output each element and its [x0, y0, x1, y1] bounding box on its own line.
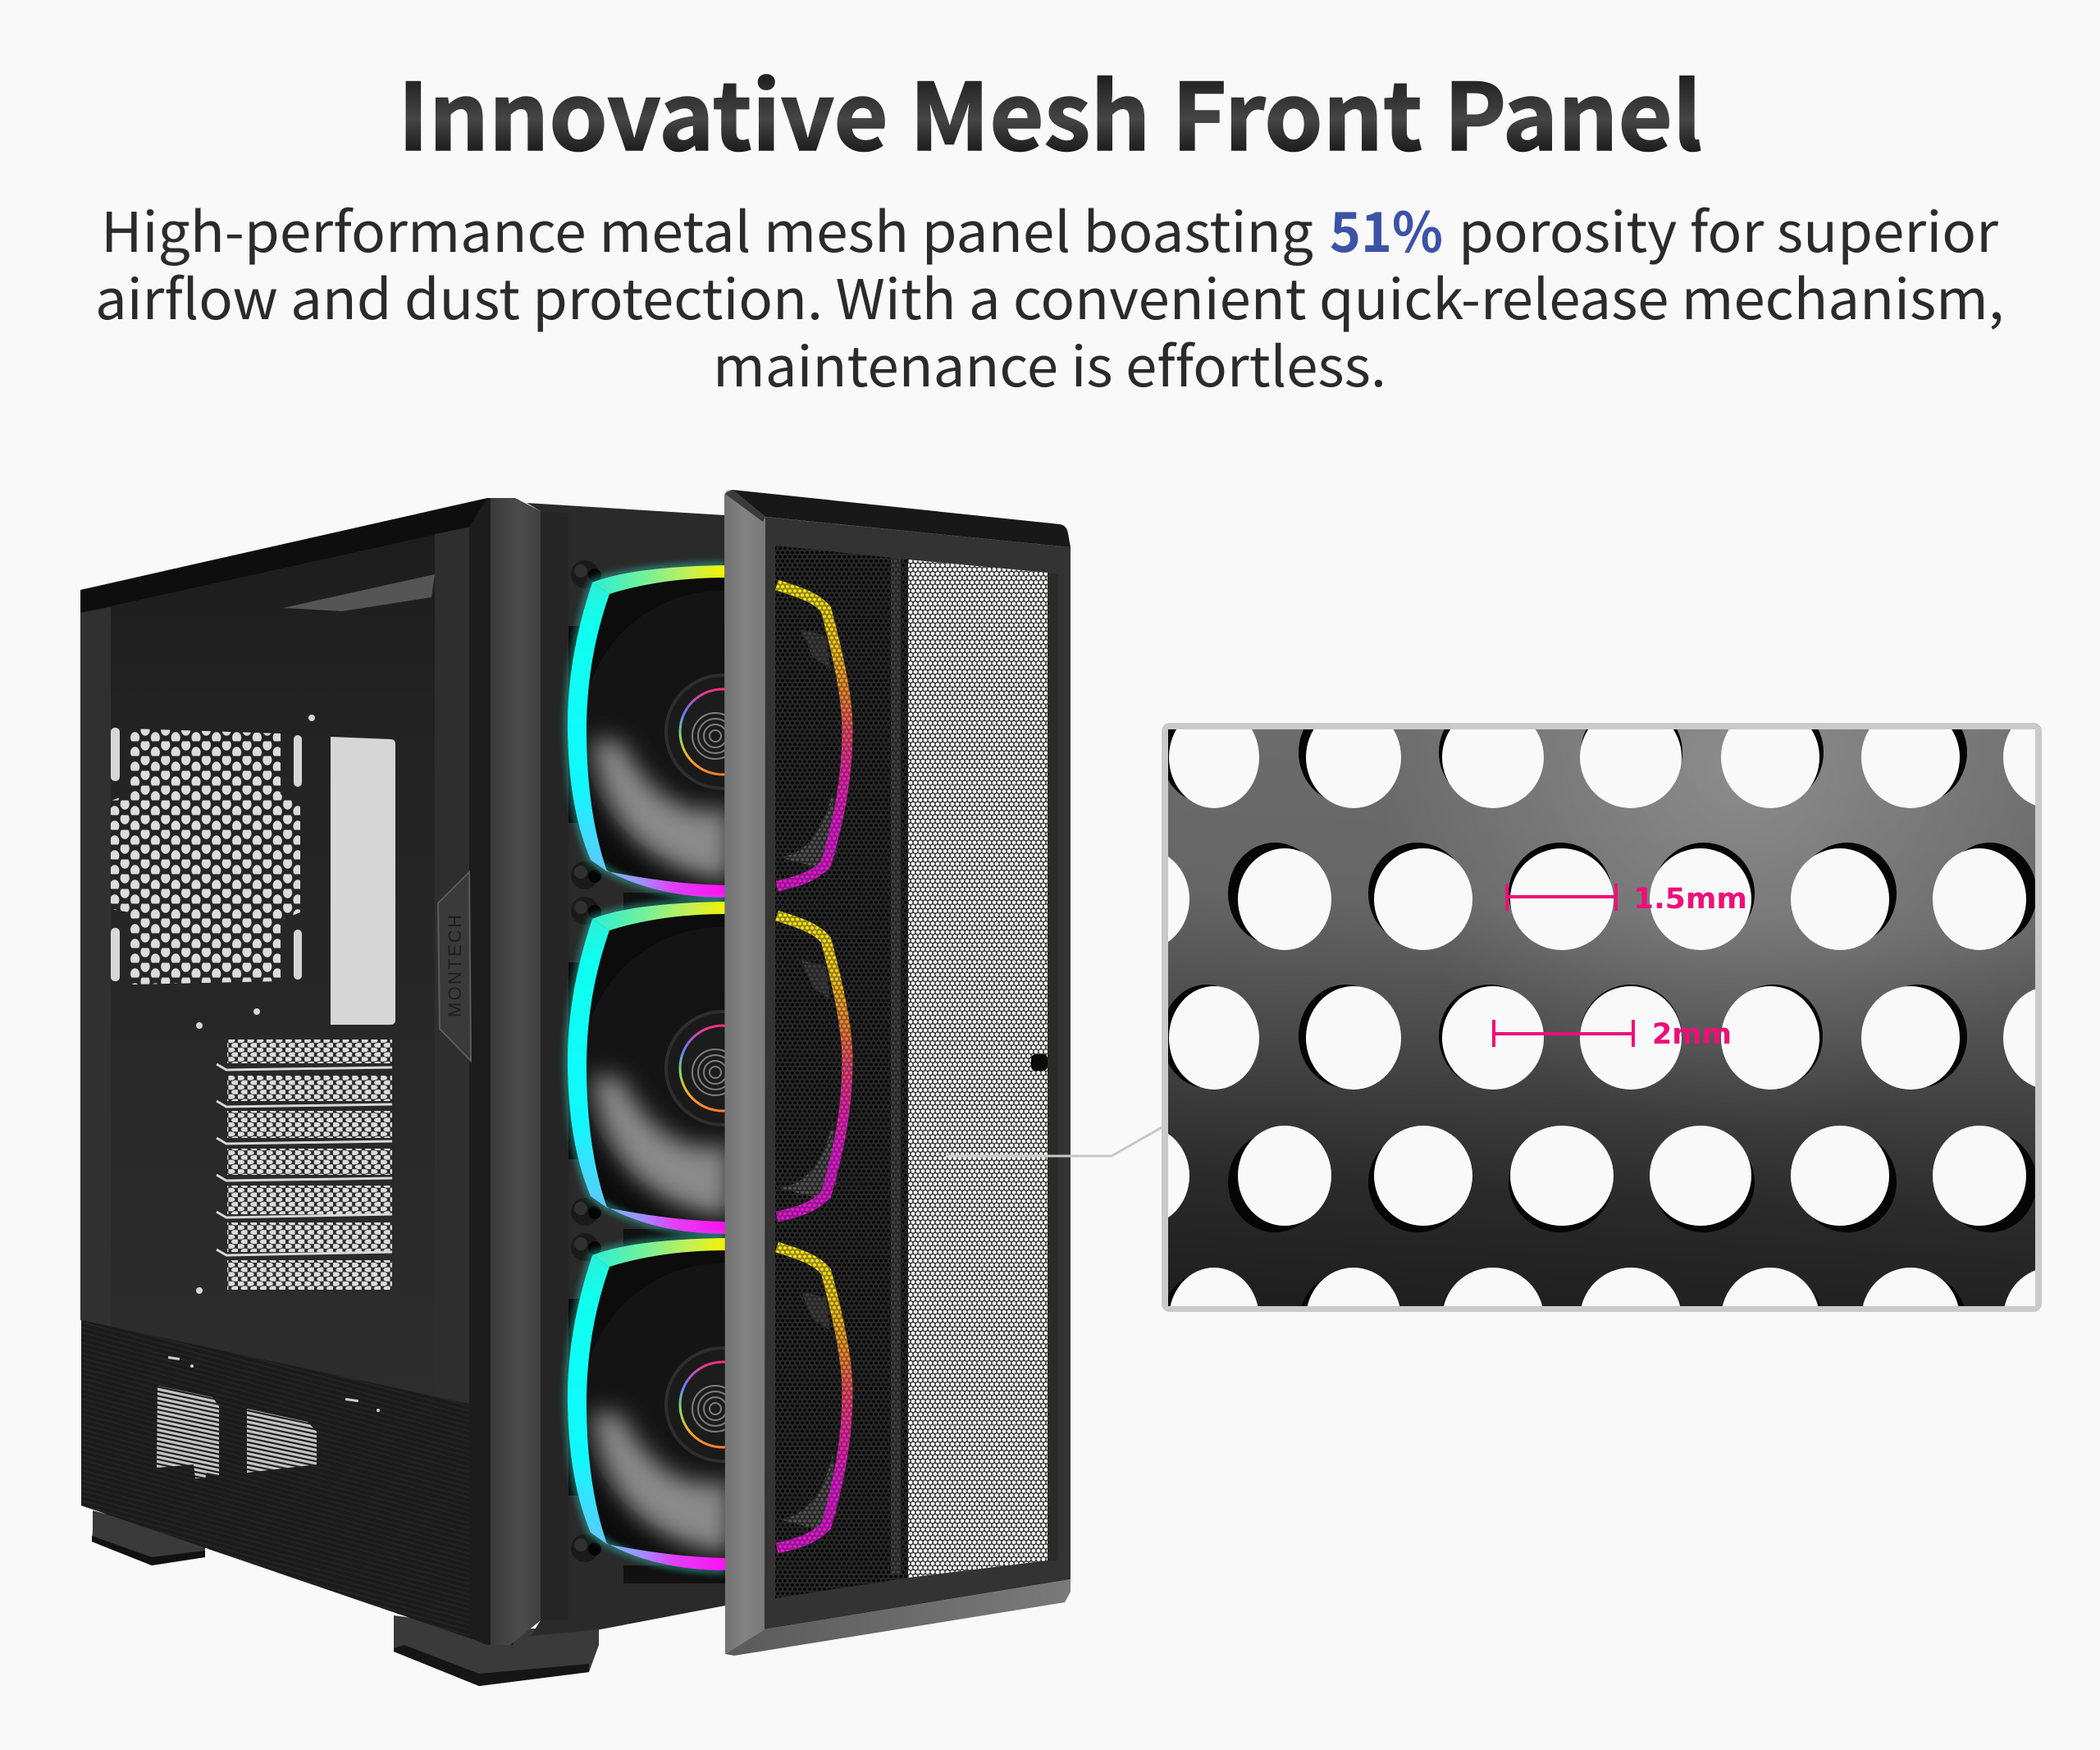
door latch — [1031, 1054, 1048, 1071]
front door panel — [724, 490, 1071, 1656]
title: Innovative Mesh Front Panel — [398, 43, 1702, 177]
magnified mesh callout panel — [1162, 723, 2042, 1312]
description text: 51% — [1330, 189, 1443, 268]
front pillar — [469, 498, 541, 1645]
holes — [1168, 729, 2035, 1306]
hole shadows — [1168, 729, 2035, 1306]
description text: High-performance metal mesh panel boasting — [101, 189, 1313, 268]
fan 1 — [568, 560, 861, 911]
hole pitch dimension: 2mm — [1652, 1018, 1732, 1051]
dark mesh area with fan lights — [775, 546, 908, 1598]
hole diameter dimension — [1507, 883, 1747, 916]
hole pitch dimension — [1494, 1018, 1732, 1051]
MONTECH badge — [438, 872, 471, 1061]
fan bay — [527, 503, 725, 1636]
hole diameter dimension: 1.5mm — [1633, 883, 1747, 916]
description text: porosity for superior — [1459, 189, 1999, 268]
perforated metal plate — [1168, 729, 2035, 1306]
top edge — [80, 498, 492, 613]
lower shroud panel — [81, 1320, 472, 1639]
left foot — [92, 1510, 205, 1565]
bright mesh area — [908, 560, 1048, 1578]
MONTECH badge: MONTECH — [445, 915, 465, 1017]
PSU ventilation holes — [111, 729, 300, 985]
door inner frame — [765, 517, 1071, 1629]
side glass window — [80, 527, 471, 1406]
PCI slot covers — [217, 1039, 392, 1290]
vent grille left — [157, 1386, 219, 1478]
description text: airflow and dust protection. With a convenient quick-release mechanism, — [95, 256, 2004, 336]
description text — [95, 189, 2004, 403]
PC case illustration — [80, 490, 1071, 1686]
description text: maintenance is effortless. — [713, 323, 1386, 403]
fan 3 — [568, 1233, 861, 1583]
right foot — [394, 1615, 599, 1686]
fan 2 — [568, 897, 861, 1247]
mounting slots — [111, 715, 315, 1294]
door left bevel — [724, 490, 765, 1654]
vent grille right — [247, 1409, 317, 1473]
door top edge — [733, 490, 1071, 547]
callout connector line — [946, 1126, 1165, 1156]
door bottom edge — [725, 1579, 1071, 1656]
cable opening — [331, 737, 395, 1025]
